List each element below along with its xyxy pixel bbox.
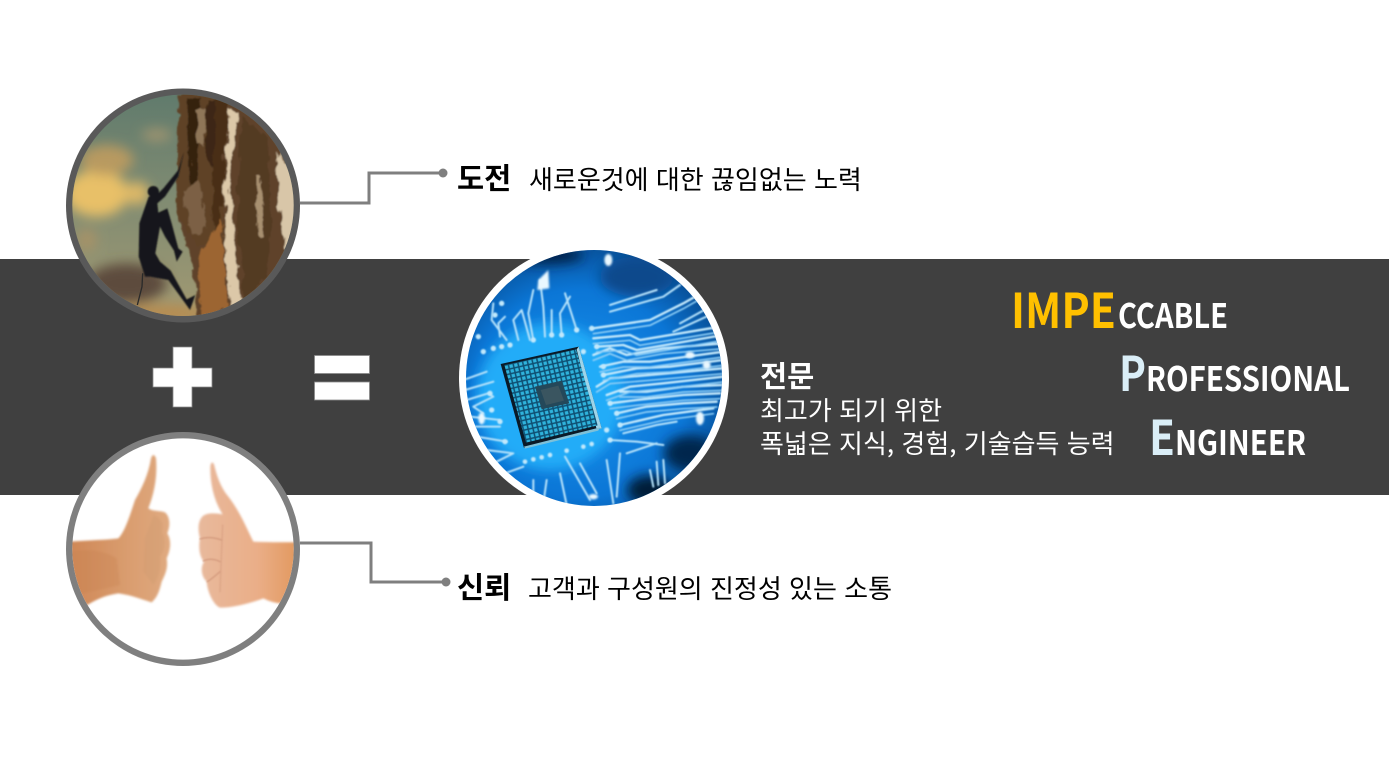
text block: expertise: 전문 <box>760 354 814 396</box>
text block: expertise: 폭넓은 지식, 경험, 기술습득 능력 <box>760 424 1115 461</box>
connector: trust <box>300 543 450 586</box>
image circle: thumbs up hands <box>66 432 300 668</box>
heading: IMPECCABLE: CCABLE <box>1118 289 1228 338</box>
image circle: circuit board chip <box>457 243 730 513</box>
text block: expertise <box>760 354 1115 461</box>
icon: plus sign <box>153 347 212 407</box>
heading: PROFESSIONAL <box>1119 335 1350 405</box>
text block: expertise: 최고가 되기 위한 <box>760 391 942 428</box>
icon: equals sign <box>314 356 370 400</box>
heading: IMPECCABLE <box>1011 272 1228 342</box>
dark band <box>0 259 1389 495</box>
climber silhouette <box>139 152 195 310</box>
traces left <box>463 372 487 380</box>
label: challenge: 도전 <box>457 156 511 198</box>
heading: PROFESSIONAL: P <box>1119 335 1146 405</box>
label: trust: 신뢰 <box>457 565 511 607</box>
heading: ENGINEER: NGINEER <box>1175 416 1306 465</box>
heading: ENGINEER <box>1149 399 1306 469</box>
heading: ENGINEER: E <box>1149 399 1175 469</box>
heading: PROFESSIONAL: ROFESSIONAL <box>1146 352 1350 401</box>
image circle: rock climber <box>65 87 307 327</box>
heading: IMPECCABLE: IMPE <box>1011 272 1116 342</box>
hand: left thumb <box>70 455 170 612</box>
hand: right thumb <box>199 462 297 608</box>
connector: challenge <box>300 168 448 203</box>
traces bottom <box>543 480 547 503</box>
chip <box>501 347 602 449</box>
traces top <box>492 303 507 340</box>
label: challenge: 새로운것에 대한 끊임없는 노력 <box>529 160 862 197</box>
label: trust: 고객과 구성원의 진정성 있는 소통 <box>528 569 892 606</box>
